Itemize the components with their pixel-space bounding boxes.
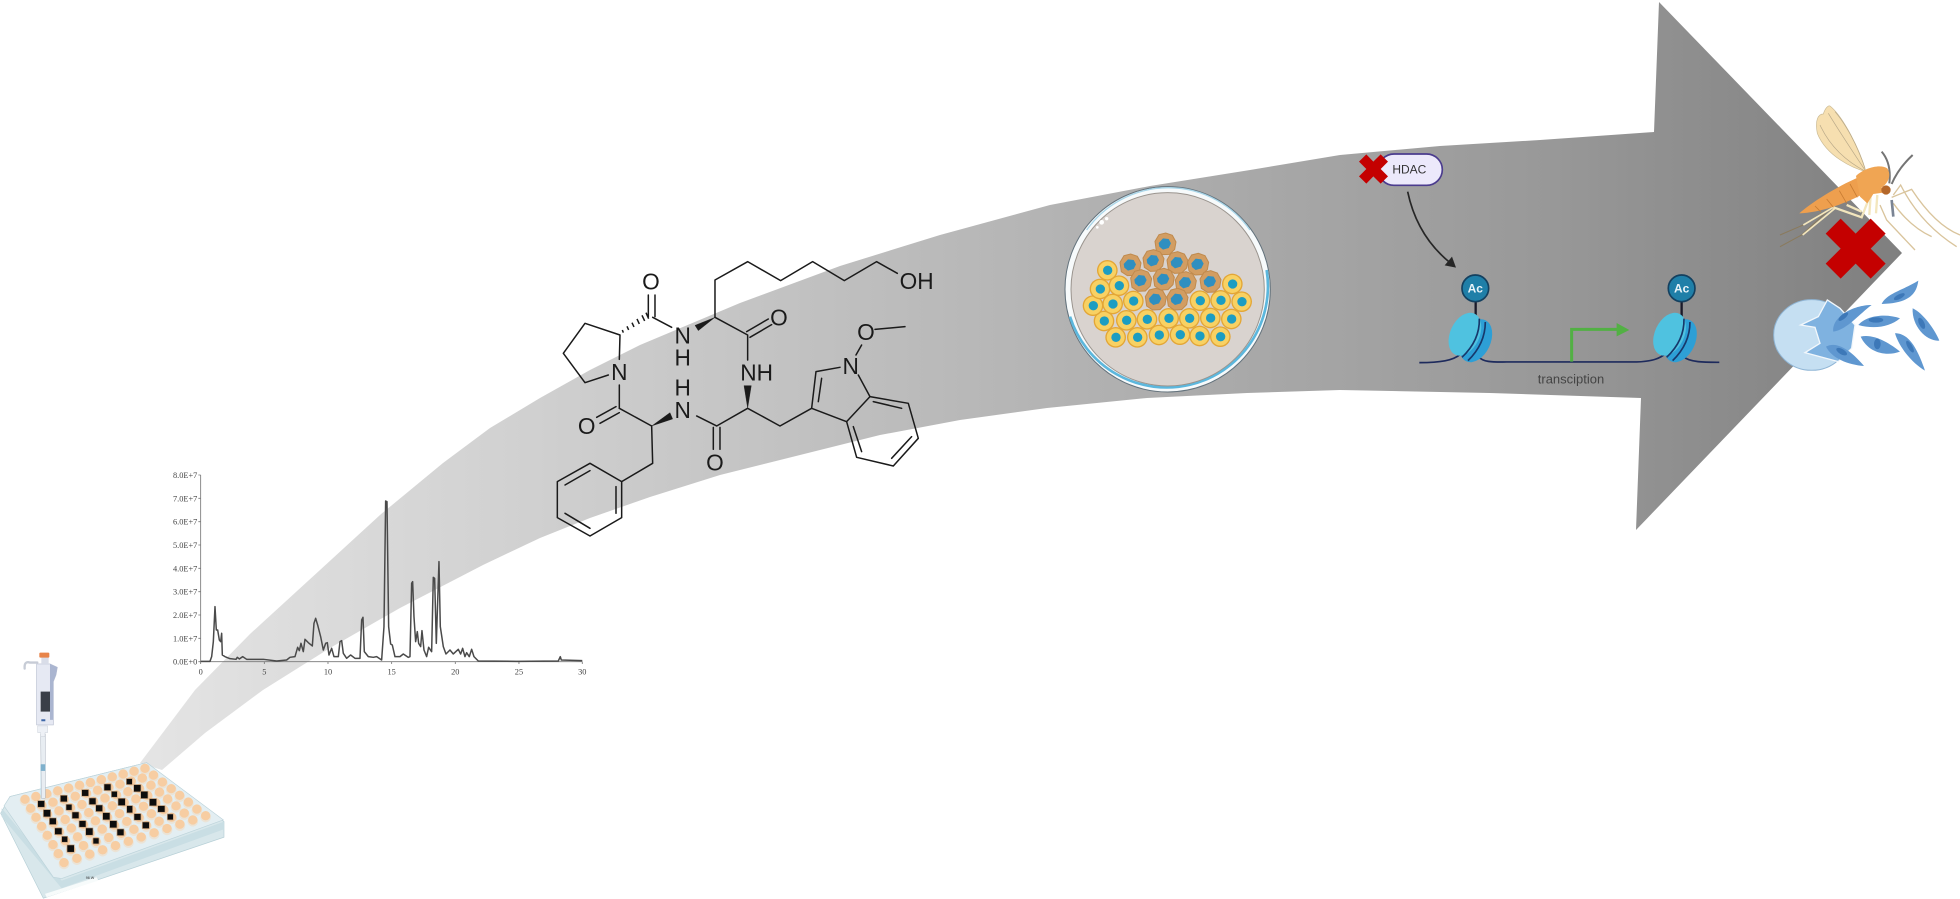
mosquito xyxy=(1780,106,1960,250)
atom labels: N xyxy=(842,353,859,379)
chart axis labels: 5 xyxy=(262,668,266,677)
atom labels: N xyxy=(674,397,691,423)
mosquito mid legs xyxy=(1833,195,1877,217)
chromatogram chart xyxy=(173,471,586,677)
chemical structure xyxy=(557,262,934,536)
healthy yellow cells xyxy=(1083,260,1252,348)
indole ring xyxy=(812,327,918,466)
atom labels: N xyxy=(611,359,628,385)
chromatogram trace xyxy=(201,501,582,661)
mosquito hind legs xyxy=(1780,207,1835,247)
atom labels: H xyxy=(674,344,691,370)
transcription label: transciption xyxy=(1538,372,1604,387)
plate wells xyxy=(25,768,206,864)
black well markers xyxy=(38,779,173,852)
DNA strand xyxy=(1419,353,1719,363)
peptide backbone bonds xyxy=(622,317,812,482)
acetylated nucleosome left: Ac xyxy=(1468,282,1483,296)
plate body xyxy=(1,763,224,898)
pipette xyxy=(25,653,57,798)
parasites xyxy=(1826,281,1939,371)
chart axis labels: 4.0E+7 xyxy=(173,564,197,573)
atom labels: O xyxy=(770,304,788,330)
chart axis labels: 25 xyxy=(515,668,523,677)
mosquito wings xyxy=(1816,106,1866,172)
big curved arrow xyxy=(140,2,1902,770)
atom labels: O xyxy=(706,450,724,476)
chart axes xyxy=(198,475,582,664)
well plate with pipette xyxy=(1,653,224,898)
atom labels xyxy=(578,268,934,476)
atom labels: O xyxy=(578,413,595,439)
parasite egg and parasites xyxy=(1774,281,1939,371)
atom labels: NH xyxy=(740,360,773,386)
acetylated nucleosome right: Ac xyxy=(1674,282,1690,296)
dish xyxy=(1065,187,1270,392)
mosquito front legs xyxy=(1880,185,1960,250)
HDAC pill: HDAC xyxy=(1392,163,1427,177)
arrow from HDAC to nucleosome xyxy=(1408,192,1456,268)
chart axis labels: 15 xyxy=(387,668,396,677)
HDAC pill xyxy=(1378,154,1442,185)
chart axis labels: 6.0E+7 xyxy=(173,518,197,527)
chart axis labels xyxy=(173,471,586,677)
phenyl ring xyxy=(557,463,622,536)
red cross xyxy=(1826,219,1886,279)
acetylated nucleosome right xyxy=(1647,275,1703,367)
parasite egg xyxy=(1774,300,1855,370)
affected brown cells xyxy=(1120,233,1221,310)
proline ring and carbonyl bonds xyxy=(563,295,672,426)
chart axis labels: 1.0E+7 xyxy=(173,634,197,643)
chart axis labels: 8.0E+7 xyxy=(173,471,197,480)
chart axis labels: 7.0E+7 xyxy=(173,494,197,503)
atom labels: O xyxy=(857,319,875,345)
plate body: 96 W xyxy=(86,876,95,880)
atom labels: N xyxy=(674,322,691,348)
petri dish with cells xyxy=(1065,187,1270,392)
red cross on HDAC xyxy=(1359,154,1388,184)
atom labels: O xyxy=(642,268,660,294)
chart axis labels: 10 xyxy=(324,668,332,677)
HDAC inhibition and transcription diagram xyxy=(1359,154,1719,387)
chart axis labels: 0 xyxy=(199,668,203,677)
chart axis labels: 2.0E+7 xyxy=(173,611,197,620)
chart axis labels: 0.0E+0 xyxy=(173,658,197,667)
green transcription start arrow xyxy=(1572,323,1629,362)
hydroxyalkyl chain xyxy=(715,262,897,317)
atom labels: OH xyxy=(900,268,934,294)
chart axis labels: 5.0E+7 xyxy=(173,541,197,550)
atom labels: H xyxy=(674,374,691,400)
chart axis labels: 3.0E+7 xyxy=(173,588,197,597)
acetylated nucleosome left xyxy=(1442,275,1499,367)
chart axis labels: 30 xyxy=(578,668,586,677)
chart axis labels: 20 xyxy=(451,668,459,677)
mosquito antennae xyxy=(1882,152,1913,184)
mosquito body xyxy=(1799,166,1893,217)
